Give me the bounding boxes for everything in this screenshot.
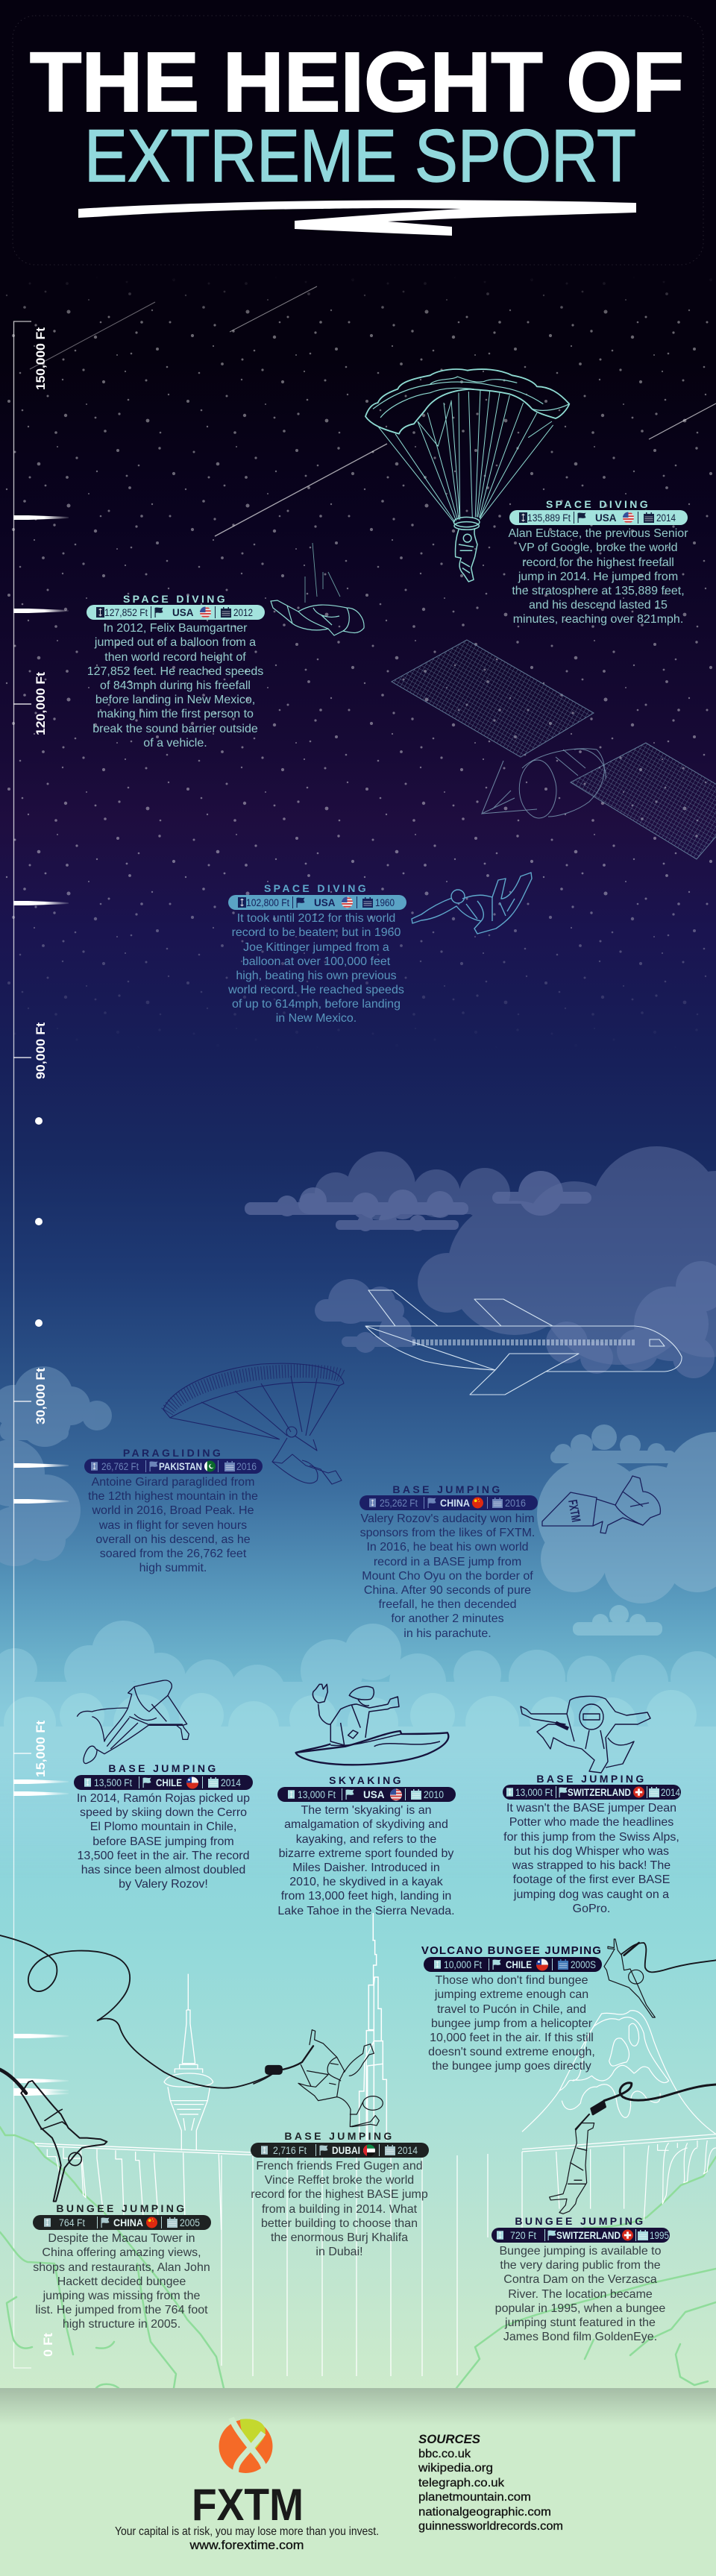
description: before landing in New Mexico, [95,694,255,706]
solar panel lower [571,743,716,859]
description: in Dubai! [315,2246,363,2258]
stats pill [87,605,265,620]
sources heading: SOURCES [418,2432,481,2446]
description: VP of Google, broke the world [518,541,678,554]
description: shops and restaurants, Alan John [33,2261,210,2274]
description: world record. He reached speeds [227,984,404,996]
description: China offering amazing views, [42,2246,201,2259]
description: freefall, he then decended [378,1598,517,1611]
description: record for the highest BASE jump [251,2188,428,2201]
description: high structure in 2005. [63,2318,180,2331]
card: paragliding [84,1447,263,1574]
description: for this jump from the Swiss Alps, [503,1831,679,1844]
heading: BASE JUMPING [392,1483,503,1495]
stats pill: 127,852 Ft [104,607,148,618]
stats pill: 2014 [661,1787,680,1798]
description: Despite the Macau Tower in [48,2232,195,2245]
clouds: left side [0,1366,112,1566]
title [30,35,684,236]
description: for another 2 minutes [391,1612,504,1625]
description: bungee jump from a helicopter [431,2017,593,2030]
source links: telegraph.co.uk [418,2477,505,2489]
description: in his parachute. [403,1627,492,1640]
description: the stratosphere at 135,889 feet, [512,585,685,597]
illustration: satellite [392,640,716,859]
description: has since been almost doubled [81,1864,245,1876]
description [87,622,263,750]
card: bungee jumping China [33,2202,211,2331]
description: In 2014, Ramón Rojas picked up [77,1792,250,1805]
icon: contra dam bungee jumper [550,2083,716,2214]
description: Alan Eustace, the previous Senior [508,527,688,540]
description: was strapped to his back! The [512,1859,671,1872]
stats pill [33,2215,211,2230]
clouds: distant dome clouds [298,1146,716,1365]
description: Vince Reffet broke the world [265,2174,414,2187]
source links: wikipedia.org [418,2462,493,2475]
description: sponsors from the likes of FXTM. [360,1527,535,1539]
stats pill: SWITZERLAND [556,2230,621,2241]
stats pill: USA [363,1789,385,1800]
description: making him the first person to [97,708,254,720]
description: James Bond film GoldenEye. [503,2331,657,2343]
description: In 2012, Felix Baumgartner [103,622,248,635]
card: bungee jumping Switzerland [492,2215,670,2343]
description: China. After 90 seconds of pure [364,1584,531,1597]
description: jump in 2014. He jumped from [518,571,678,583]
description [277,1804,455,1917]
card: volcano bungee jumping [421,1944,602,2073]
description [251,2160,428,2258]
icon: BASE jumper with bungee Dubai [254,2030,383,2127]
description: travel to Pucón in Chile, and [437,2003,586,2016]
bridge deck [35,2143,261,2155]
description: jumping was missing from the [43,2290,200,2302]
website: www.forextime.com [189,2539,304,2552]
description: in New Mexico. [276,1012,357,1025]
solar panel upper [392,640,594,757]
description: Antoine Girard paraglided from [92,1476,254,1489]
description: of a vehicle. [143,737,207,750]
description [77,1792,250,1891]
stats pill: USA [595,512,617,524]
card: Joe Kittinger space diving [227,882,406,1025]
scale labels: 120,000 Ft [34,672,48,735]
description: footage of the first ever BASE [513,1873,670,1886]
heading: VOLCANO BUNGEE JUMPING [421,1944,602,1957]
description: Bungee jumping is available to [499,2245,662,2258]
description: Joe Kittinger jumped from a [243,941,389,954]
stats pill: CHINA [113,2217,143,2228]
clouds: lower bank front tier [0,1690,716,1782]
stats pill: 102,800 Ft [246,897,289,908]
logo wordmark: FXTM [192,2480,304,2530]
description: break the sound barrier outside [92,723,258,735]
stats pill: 2012 [233,607,253,618]
description: River. The location became [508,2288,653,2301]
description [503,1802,679,1915]
card: BASE jumping Chile [74,1762,253,1891]
description: soared from the 26,762 feet [100,1548,247,1560]
description: Valery Rozov's audacity won him [360,1512,535,1525]
stats pill [277,1787,456,1802]
icon: wingsuit jumper with FXTM wing [542,1476,660,1533]
bungee cord [0,1935,271,2088]
card: BASE jumping Dubai [251,2130,429,2258]
description: speed by skiing down the Cerro [80,1806,247,1819]
stats pill: 720 Ft [510,2230,536,2241]
description: It wasn't the BASE jumper Dean [506,1802,676,1815]
description: Lake Tahoe in the Sierra Nevada. [277,1905,455,1917]
stats pill: 2,716 Ft [273,2145,307,2156]
clouds: small layered clouds [245,1171,591,1231]
scale labels: 0 Ft [41,2333,55,2357]
bridge arches [47,2148,222,2230]
stats pill: 2005 [180,2217,200,2228]
description: Miles Daisher. Introduced in [292,1862,440,1874]
description: Hackett decided bungee [57,2275,186,2288]
description: the bungee jump goes directly [432,2060,591,2073]
description: was in flight for seven hours [98,1519,247,1532]
stats pill: 135,889 Ft [527,512,571,524]
satellite body [482,749,606,818]
description [495,2245,665,2343]
illustration: Burj Khalifa outline [359,1913,386,2140]
description: record to be beaten, but in 1960 [232,926,401,939]
description: record in a BASE jump from [374,1556,521,1568]
stats pill: 2000S [571,1959,596,1970]
title brush underline [78,200,636,236]
icon: volcano bungee jumper [604,1939,716,2017]
thick cord [0,2070,26,2093]
footer band [0,2388,716,2576]
stats pill: 1995 [650,2230,669,2241]
stats pill: 10,000 Ft [444,1959,482,1970]
scale axis [13,321,31,2368]
scale labels: 30,000 Ft [34,1368,48,1424]
stats pill: CHILE [506,1959,532,1970]
stats pill: DUBAI [332,2145,360,2156]
icon: astronaut freefall [271,543,364,635]
description [227,912,404,1025]
scale labels: 15,000 Ft [34,1721,48,1777]
heading: BASE JUMPING [536,1773,647,1785]
stats pill: 13,000 Ft [515,1787,553,1798]
illustration: volcano contour [522,2011,716,2220]
description: jumping extreme enough can [434,1988,588,2001]
description: jumping stunt featured in the [504,2316,656,2329]
stats pill: CHINA [440,1498,470,1509]
heading: PARAGLIDING [123,1447,223,1459]
stats pill: 2016 [505,1498,526,1509]
footer shadow strip [0,2388,716,2425]
description: popular in 1995, when a bungee [495,2302,665,2315]
description: Mount Cho Oyu on the border of [362,1570,533,1583]
stats pill [424,1957,602,1972]
fat tapered tick marks [13,515,69,2096]
title line one: THE HEIGHT OF [30,35,684,129]
card: Felix Baumgartner space diving [87,593,265,750]
description: bizarre extreme sport founded by [279,1847,453,1860]
description: overall on his descend, as he [95,1533,251,1546]
description: It took until 2012 for this world [237,912,395,925]
description: from 13,000 feet high, landing in [281,1890,451,1903]
illustration: Macau tower and bridge [35,1974,261,2230]
stats pill [251,2143,429,2158]
description: Potter who made the headlines [509,1816,673,1829]
tower [164,1974,213,2150]
icon: paraglider [163,1363,344,1484]
stats pill [503,1785,681,1800]
scale labels [34,327,55,2357]
description: list. He jumped from the 764 foot [35,2304,208,2316]
description: the 12th highest mountain in the [88,1490,258,1503]
description: minutes, reaching over 821mph. [513,613,683,626]
stats pill: SWITZERLAND [568,1787,631,1798]
description [33,2232,210,2331]
heading: BASE JUMPING [108,1762,219,1774]
description [428,1974,595,2073]
stats pill [359,1495,538,1510]
stats pill: 13,500 Ft [94,1777,132,1788]
title frame dotted [13,16,703,265]
source links: bbc.co.uk [418,2448,471,2460]
description: In 2016, he beat his own world [366,1541,529,1554]
description: GoPro. [573,1903,610,1915]
stats pill: 1960 [375,897,395,908]
description: doesn't sound extreme enough, [428,2046,595,2058]
stats pill: 2010 [424,1789,444,1800]
description: of 843mph during his freefall [100,679,251,692]
heading: SPACE DIVING [264,882,368,894]
description: record for the highest freefall [522,556,674,569]
description: Those who don't find bungee [436,1974,588,1987]
description: the very daring public from the [500,2259,661,2272]
description: The term 'skyaking' is an [301,1804,432,1817]
source links: nationalgeographic.com [418,2506,551,2519]
heading: BASE JUMPING [284,2130,395,2142]
description: better building to choose than [261,2217,418,2230]
icon: skydiver Joe Kittinger [412,873,532,934]
scale labels: 150,000 Ft [34,327,48,390]
thin tick marks [13,704,31,1753]
description: then world record height of [104,651,246,664]
card: Alan Eustace space diving [508,498,688,626]
description: the enormous Burj Khalifa [271,2231,408,2244]
heading: BUNGEE JUMPING [56,2202,187,2214]
scale labels: 90,000 Ft [34,1022,48,1079]
description: French friends Fred Gugen and [256,2160,423,2173]
description: but his dog Whisper who was [514,1845,669,1858]
clouds: behind airplane [315,1261,716,1378]
sources list [418,2432,563,2533]
stats pill: USA [172,607,194,618]
stats pill: 25,262 Ft [380,1498,418,1509]
description [508,527,688,626]
stats pill: 2016 [236,1461,257,1472]
card: BASE jumping China [359,1483,538,1640]
description: from a building in 2014. What [262,2203,418,2216]
clouds: right side [537,1424,716,1603]
icon: parachute with space diver [365,369,569,582]
description: high summit. [139,1562,207,1574]
heading: SKYAKING [329,1774,403,1786]
risk warning: Your capital is at risk, you may lose more than you invest. [115,2525,379,2538]
description: El Plomo mountain in Chile, [90,1821,236,1833]
source links: guinnessworldrecords.com [418,2520,563,2533]
stats pill: 764 Ft [59,2217,85,2228]
description: balloon at over 100,000 feet [242,955,391,968]
description: before BASE jumping from [92,1835,234,1848]
icon: wingsuit BASE jumper Chile [77,1680,189,1764]
height scale [13,321,69,2368]
description: jumped out of a balloon from a [94,636,256,649]
stats pill [74,1775,253,1790]
description: kayaking, and refers to the [296,1833,436,1846]
description: of up to 614mph, before landing [232,998,401,1011]
stats pill [228,895,406,910]
description [88,1476,258,1574]
heading: SPACE DIVING [123,593,227,605]
heading: BUNGEE JUMPING [515,2215,646,2227]
FXTM logo [115,2418,379,2552]
heading: SPACE DIVING [546,498,650,510]
description: 127,852 feet. He reached speeds [87,665,263,678]
stats pill [492,2228,670,2243]
description: 10,000 feet in the air. If this still [430,2032,594,2044]
illustration: airplane outline [365,1290,682,1395]
card: BASE jumping Switzerland dog [503,1773,681,1915]
shooting stars [30,286,716,536]
source links [418,2448,563,2533]
stats pill: CHILE [156,1777,182,1788]
stats pill [84,1459,263,1474]
stats pill: 2014 [398,2145,418,2156]
icon: jumper with dog on his back [521,1696,650,1773]
description: Contra Dam on the Verzasca [503,2273,657,2286]
scale break dots [35,1117,43,1327]
icon: skyaker and kayak [296,1684,448,1765]
clouds: small right cluster [573,1605,662,1636]
river lines [0,2127,716,2388]
card: skyaking [277,1774,456,1917]
star field [0,276,716,1052]
description: by Valery Rozov! [119,1878,208,1891]
description: world in 2016, Broad Peak. He [91,1504,254,1517]
description: high, beating his own previous [236,970,397,982]
stats pill: 2014 [656,512,676,524]
source links: planetmountain.com [418,2491,531,2504]
description: 13,500 feet in the air. The record [78,1850,249,1862]
title line two: EXTREME SPORT [84,114,636,197]
stats pill [509,510,688,525]
description [360,1512,535,1640]
description: amalgamation of skydiving and [284,1818,448,1831]
stats pill: 2014 [221,1777,241,1788]
icon: wingsuit jumper with FXTM wing: FXTM [565,1498,583,1523]
description: 2010, he skydived in a kayak [289,1876,444,1888]
stats pill: 13,000 Ft [298,1789,336,1800]
stats pill: USA [314,897,336,908]
stats pill: PAKISTAN [159,1461,202,1472]
logo mark [219,2418,273,2476]
stats pill: 26,762 Ft [101,1461,139,1472]
description: and his descend lasted 15 [529,599,668,612]
icon: bungee cord and jumper Macau [0,1935,271,2202]
clouds: lower bank back tier [0,1621,716,1727]
description: jumping dog was caught on a [513,1888,669,1901]
jumper Macau [21,2081,107,2202]
bridge piers [222,2152,522,2376]
